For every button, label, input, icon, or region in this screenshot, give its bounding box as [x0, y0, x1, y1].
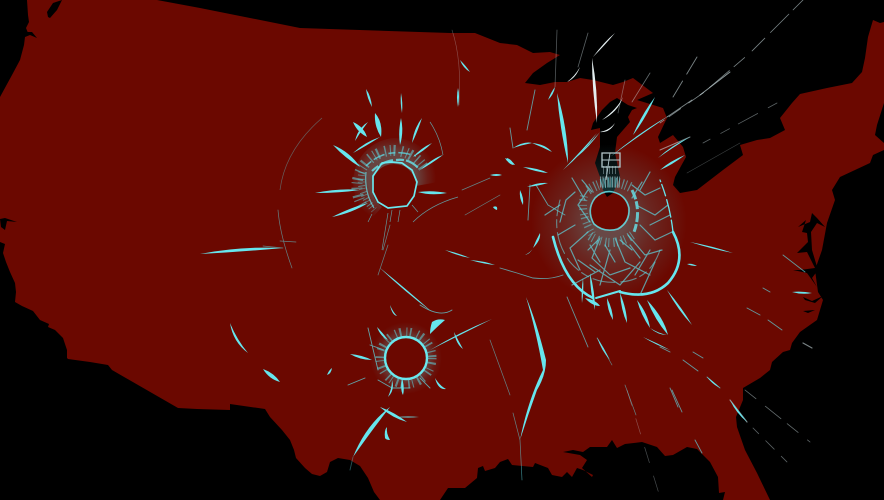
irregular mesh	[545, 172, 672, 295]
bullet hole: lower centre	[327, 305, 492, 470]
shards: radiating cracks	[327, 305, 492, 457]
isolated cracks across the map	[200, 60, 747, 480]
bullet hole: right, with large fractured ring	[500, 87, 812, 453]
fine cracks	[263, 178, 636, 480]
shards	[200, 60, 747, 440]
shards: radiating cracks	[315, 88, 459, 217]
large arc fractures	[553, 180, 679, 298]
cracks: thin lines over black water	[452, 0, 812, 497]
fine cracks around the hole	[348, 305, 452, 470]
bullet hole: upper left	[280, 88, 459, 250]
cracks: white shards near the lake	[567, 33, 623, 132]
fine cracks around the hole	[500, 90, 805, 453]
water: Lake Michigan and inlets	[0, 0, 825, 313]
fine cracks around the hole	[280, 118, 458, 250]
shards: radiating cracks	[507, 87, 812, 360]
cracks: gray mesh over the lake	[600, 153, 620, 182]
